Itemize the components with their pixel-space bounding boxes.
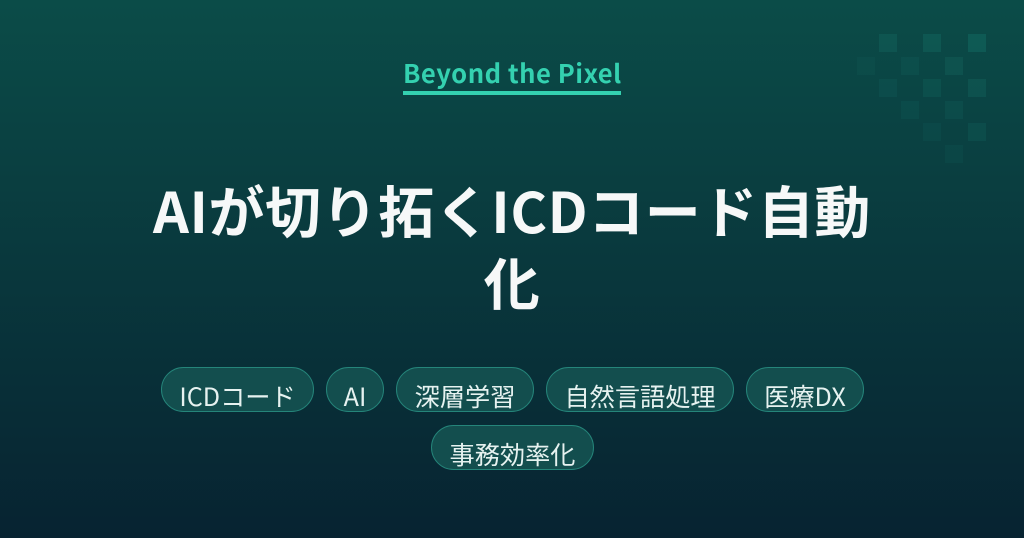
title: AIが切り拓くICDコード自動: [153, 169, 871, 250]
tag: AI: [326, 367, 384, 412]
tag: 事務効率化: 事務効率化: [450, 436, 575, 472]
brand label with underline: Beyond the Pixel: [403, 54, 622, 91]
tag: ICDコード: ICDコード: [179, 378, 296, 414]
title: 化: [484, 241, 540, 322]
tags: [161, 367, 864, 472]
tag: 事務効率化: [431, 425, 594, 470]
tag: 自然言語処理: [546, 367, 734, 412]
tag: 医療DX: 医療DX: [764, 378, 846, 414]
tag: AI: AI: [344, 378, 366, 414]
tag: 深層学習: [396, 367, 534, 412]
tag: ICDコード: [161, 367, 314, 412]
tag: 深層学習: 深層学習: [415, 378, 515, 414]
decorative tile pattern: [879, 34, 986, 141]
title: [152, 169, 871, 322]
tag: 自然言語処理: 自然言語処理: [564, 378, 716, 414]
tag: 医療DX: [746, 367, 864, 412]
